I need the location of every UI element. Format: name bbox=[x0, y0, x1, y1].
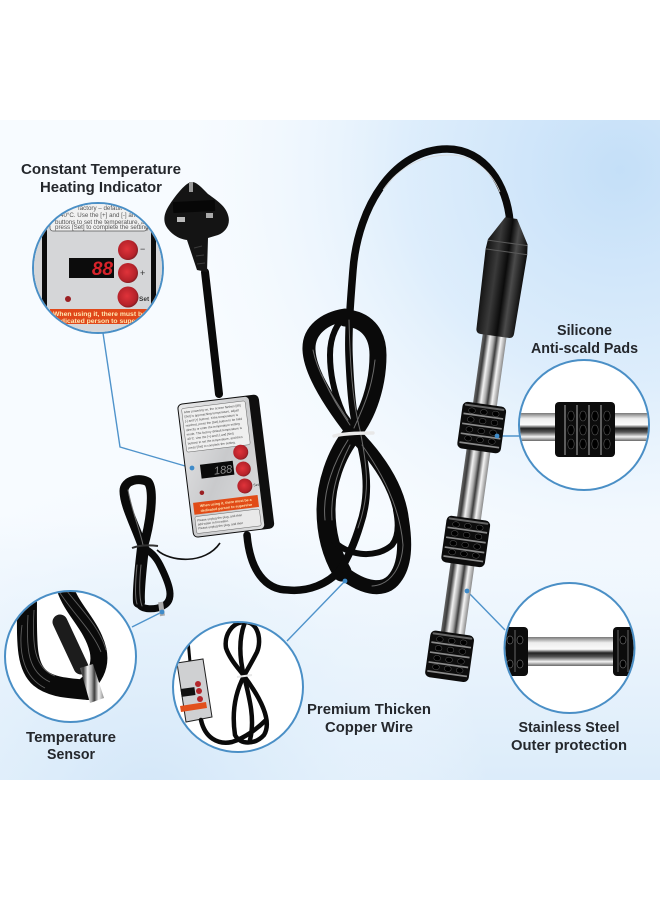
silicone pad 2 bbox=[441, 515, 491, 568]
zoomed buttons: Set bbox=[139, 296, 150, 303]
controller instruction text: After powering on, the screen flashes [88] bbox=[184, 403, 241, 414]
control buttons bbox=[232, 443, 260, 494]
upper bands bbox=[309, 315, 353, 433]
zoomed warning strip: When using it, there must be a bbox=[53, 311, 152, 318]
controller instruction text bbox=[181, 401, 250, 452]
controller instruction text: directly or enter the temperature setting bbox=[186, 422, 240, 432]
label: stainless steel outer protection bbox=[511, 720, 627, 754]
label: silicone anti-scald pads: Anti-scald Pads bbox=[531, 341, 638, 357]
controller instruction text: mode. The factory default temperature is bbox=[186, 426, 243, 437]
controller box bbox=[177, 394, 275, 538]
label: constant temperature heating indicator: Constant Temperature bbox=[21, 162, 181, 178]
label: temperature sensor bbox=[26, 730, 116, 763]
anti-scald pad leader line bbox=[497, 435, 519, 437]
label: silicone anti-scald pads bbox=[531, 323, 638, 357]
leader dots bbox=[160, 434, 499, 614]
steel tube bbox=[438, 327, 507, 657]
lower instruction text: Please unplug the plug, and then bbox=[197, 513, 243, 523]
label: stainless steel outer protection: Outer protection bbox=[511, 738, 627, 754]
circle: heating indicator detail bbox=[33, 200, 166, 340]
label: constant temperature heating indicator bbox=[21, 162, 181, 196]
label: premium thicken copper wire: Premium Thicken bbox=[307, 702, 431, 718]
UK plug bbox=[164, 182, 229, 272]
circle: copper wire detail bbox=[173, 622, 303, 752]
zoomed buttons: − bbox=[140, 244, 145, 254]
circle: silicone pad detail bbox=[515, 360, 655, 490]
power cord and coiled cable bbox=[205, 149, 510, 590]
heater cap bbox=[474, 215, 532, 339]
temperature sensor leader line bbox=[132, 612, 162, 627]
indicator LED bbox=[199, 490, 204, 495]
zoomed warning strip bbox=[50, 309, 152, 325]
zoomed instruction text: press [Set] to complete the setting. bbox=[55, 224, 151, 231]
label: temperature sensor: Temperature bbox=[26, 730, 116, 746]
label: silicone anti-scald pads: Silicone bbox=[557, 323, 612, 339]
label: temperature sensor: Sensor bbox=[47, 747, 95, 763]
plug cord bbox=[205, 272, 219, 394]
zoomed instruction text: factory – default temp bbox=[78, 205, 138, 212]
mini controller bbox=[177, 659, 212, 722]
zoomed warning strip: dedicated person to supervise bbox=[53, 318, 151, 325]
circle: stainless steel detail bbox=[500, 583, 639, 713]
silicone pad 3 bbox=[425, 630, 475, 683]
warning strip: dedicated person to supervise bbox=[200, 503, 252, 513]
warning strip bbox=[193, 495, 259, 515]
controller instruction text: [Set] is approaching temperature, adjust bbox=[184, 408, 239, 419]
lower bands bbox=[326, 433, 353, 572]
control buttons: Set bbox=[253, 483, 259, 487]
controller instruction text: 40°C. Use the [+] and [-] and [Set] bbox=[187, 431, 234, 441]
digital display bbox=[200, 461, 234, 479]
label: premium thicken copper wire: Copper Wire bbox=[325, 720, 413, 736]
zoomed instruction text: 40°C. Use the [+] and [-] and bbox=[60, 212, 139, 219]
cable tie bbox=[334, 433, 373, 436]
controller instruction text: [-] and [+] buttons. If the temperature is bbox=[185, 413, 239, 423]
stainless steel leader line bbox=[467, 591, 505, 630]
label: stainless steel outer protection: Stainless Steel bbox=[518, 720, 620, 736]
copper wire leader line bbox=[287, 581, 345, 641]
zoomed instruction text bbox=[55, 206, 148, 230]
warning strip: When using it, there must be a bbox=[200, 498, 253, 508]
zoomed instruction text: buttons to set the temperature, and then bbox=[55, 219, 166, 226]
zoomed buttons bbox=[118, 240, 150, 308]
label: premium thicken copper wire bbox=[307, 702, 431, 736]
circle: temperature sensor detail bbox=[5, 588, 136, 722]
label: constant temperature heating indicator: Heating Indicator bbox=[40, 180, 162, 196]
zoomed buttons: + bbox=[140, 268, 145, 278]
controller instruction text: buttons to set the temperature, and then bbox=[188, 435, 243, 446]
sensor cable coil bbox=[124, 480, 220, 616]
heater cable arc bbox=[247, 149, 510, 590]
heater rod bbox=[425, 215, 533, 683]
digital display: 188 bbox=[213, 463, 234, 478]
lower instruction text: Please unplug the plug, and then bbox=[198, 521, 244, 530]
lower instruction text: add water in hot water. bbox=[197, 519, 229, 526]
controller instruction text: press [Set] to complete the setting. bbox=[188, 440, 236, 450]
zoomed display: 88 bbox=[92, 259, 113, 280]
heating indicator leader line bbox=[103, 333, 192, 468]
silicone pad 1 bbox=[457, 401, 507, 454]
controller instruction text: reached, press the [Set] button to be held bbox=[185, 417, 242, 428]
lower instruction text bbox=[195, 509, 261, 534]
mini cable coil bbox=[201, 622, 267, 743]
